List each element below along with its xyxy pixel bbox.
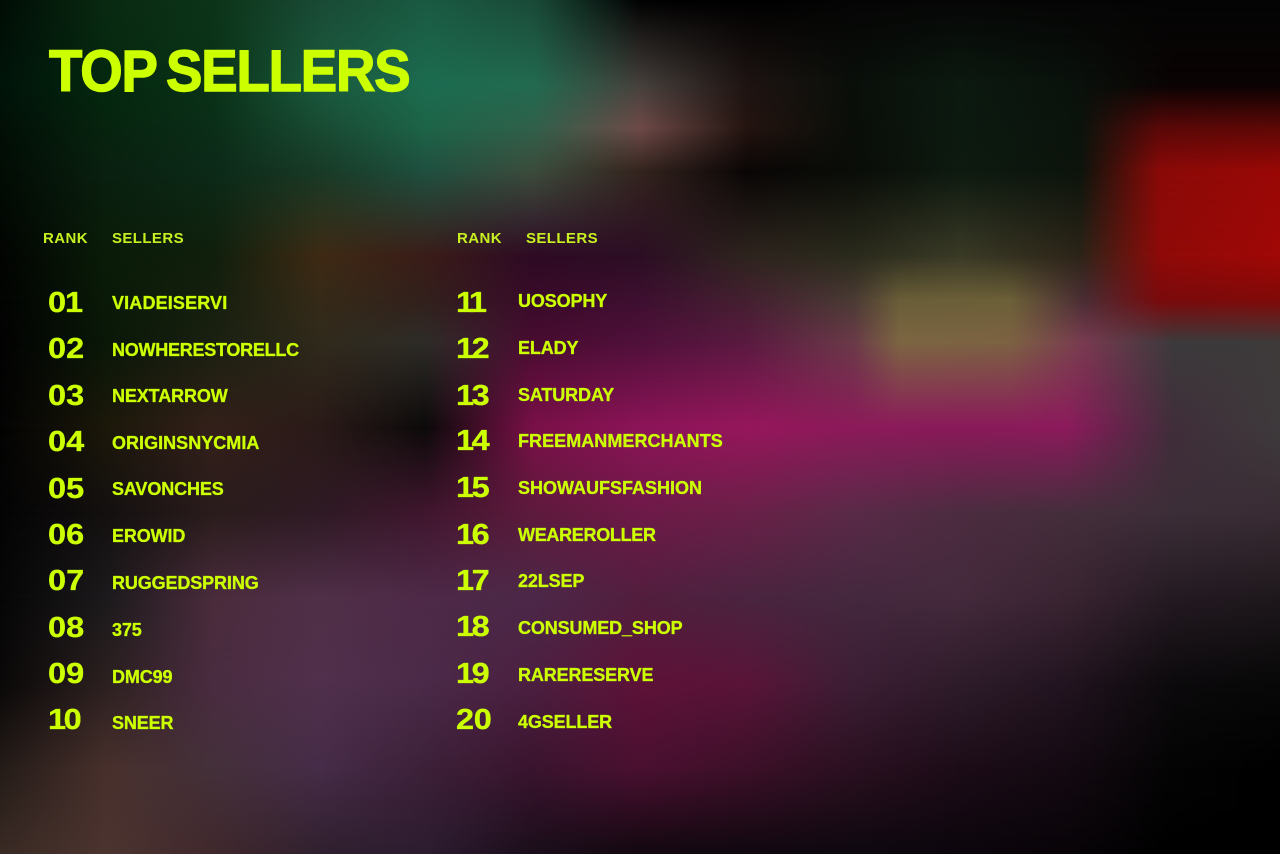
table header: right column bbox=[457, 230, 598, 247]
ranking list: 01 to 10: 10 bbox=[48, 704, 79, 736]
ranking list: 11 to 20: 19 bbox=[456, 658, 487, 690]
ranking list: 01 to 10: 01 bbox=[48, 287, 82, 319]
ranking list: 01 to 10: DMC99 bbox=[112, 667, 172, 687]
ranking list: 01 to 10: 03 bbox=[48, 380, 84, 412]
ranking list: 11 to 20: 4GSELLER bbox=[518, 712, 612, 732]
ranking list: 01 to 10: ORIGINSNYCMIA bbox=[112, 433, 259, 453]
ranking list: 01 to 10 bbox=[48, 287, 299, 736]
ranking list: 11 to 20: UOSOPHY bbox=[518, 291, 607, 311]
ranking list: 01 to 10: SAVONCHES bbox=[112, 479, 224, 499]
ranking list: 11 to 20 bbox=[456, 287, 723, 736]
ranking list: 11 to 20: 17 bbox=[456, 565, 487, 597]
table header: left column: SELLERS bbox=[112, 230, 184, 247]
ranking list: 01 to 10: 08 bbox=[48, 612, 84, 644]
ranking list: 11 to 20: 22LSEP bbox=[518, 571, 584, 591]
table header: right column: RANK bbox=[457, 230, 502, 247]
ranking list: 11 to 20: 14 bbox=[456, 425, 487, 457]
ranking list: 01 to 10: 05 bbox=[48, 473, 84, 505]
ranking list: 01 to 10: 06 bbox=[48, 519, 84, 551]
ranking list: 11 to 20: 12 bbox=[456, 333, 487, 365]
ranking list: 11 to 20: 13 bbox=[456, 380, 487, 412]
ranking list: 11 to 20: SHOWAUFSFASHION bbox=[518, 478, 702, 498]
ranking list: 01 to 10: NOWHERESTORELLC bbox=[112, 340, 299, 360]
ranking list: 01 to 10: 375 bbox=[112, 620, 142, 640]
ranking list: 01 to 10: NEXTARROW bbox=[112, 386, 228, 406]
ranking list: 11 to 20: RARERESERVE bbox=[518, 665, 653, 685]
table header: left column: RANK bbox=[43, 230, 88, 247]
ranking list: 01 to 10: SNEER bbox=[112, 713, 173, 733]
ranking list: 11 to 20: SATURDAY bbox=[518, 385, 614, 405]
ranking list: 01 to 10: 09 bbox=[48, 658, 84, 690]
table header: left column bbox=[43, 230, 184, 247]
ranking list: 11 to 20: 18 bbox=[456, 611, 487, 643]
ranking list: 01 to 10: RUGGEDSPRING bbox=[112, 573, 259, 593]
ranking list: 11 to 20: 20 bbox=[456, 704, 491, 736]
ranking list: 11 to 20: 15 bbox=[456, 472, 487, 504]
ranking list: 11 to 20: CONSUMED_SHOP bbox=[518, 618, 682, 638]
ranking list: 11 to 20: 16 bbox=[456, 519, 487, 551]
ranking list: 11 to 20: ELADY bbox=[518, 338, 578, 358]
ranking list: 01 to 10: EROWID bbox=[112, 526, 185, 546]
table header: right column: SELLERS bbox=[526, 230, 598, 247]
ranking list: 11 to 20: FREEMANMERCHANTS bbox=[518, 431, 723, 451]
ranking list: 01 to 10: 02 bbox=[48, 333, 84, 365]
title: TOP SELLERS bbox=[49, 39, 410, 104]
ranking list: 01 to 10: 04 bbox=[48, 426, 84, 458]
ranking list: 11 to 20: 11 bbox=[456, 287, 484, 319]
ranking list: 11 to 20: WEAREROLLER bbox=[518, 525, 656, 545]
ranking list: 01 to 10: 07 bbox=[48, 565, 84, 597]
ranking list: 01 to 10: VIADEISERVI bbox=[112, 293, 227, 313]
